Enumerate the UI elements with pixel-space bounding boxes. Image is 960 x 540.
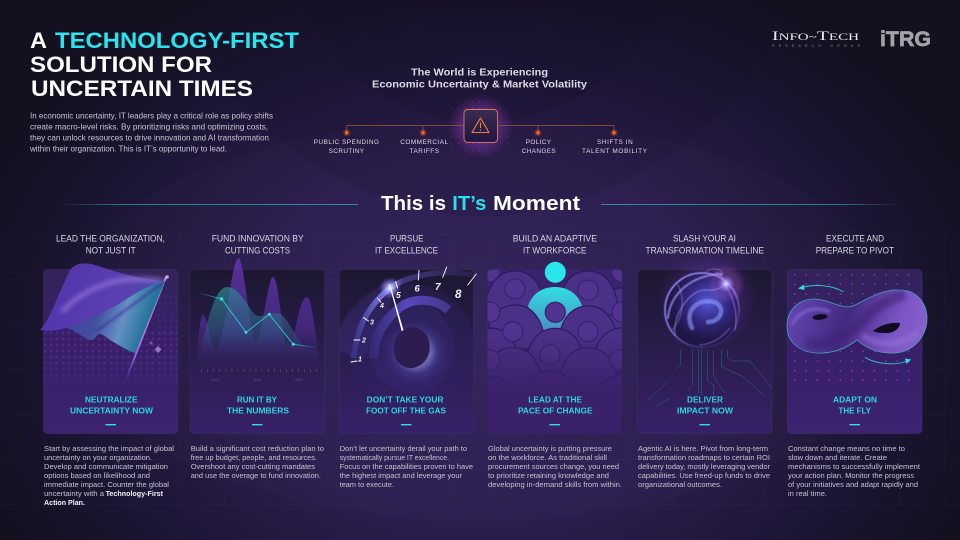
card caption <box>70 395 153 425</box>
intro text: within their organization. This is IT’s opportunity to lead. <box>29 144 227 154</box>
risk node: public spending scrutiny: SCRUTINY <box>329 148 365 155</box>
chart: area peaks and line: 2027 <box>295 378 303 382</box>
arrow: bottom curved <box>865 357 911 364</box>
intro text: In economic uncertainty, IT leaders play a critical role as policy shifts <box>30 112 273 120</box>
description: and use the overage to fund innovation. <box>191 471 321 480</box>
description: team to execute. <box>340 480 394 489</box>
dot grid <box>794 274 910 381</box>
description: Agentic AI is here. Pivot from long-term <box>638 444 768 453</box>
card caption: PACE OF CHANGE <box>518 406 593 415</box>
card background <box>44 270 178 434</box>
heading: CUTTING COSTS <box>225 246 290 256</box>
heading: PURSUE <box>390 234 424 244</box>
description <box>44 444 174 507</box>
card caption: THE FLY <box>838 406 872 415</box>
heading: SLASH YOUR AI <box>673 234 736 244</box>
risk node: policy changes <box>522 129 556 155</box>
title: A <box>30 28 47 53</box>
description: systematically pursue IT excellence. <box>340 453 449 462</box>
description: Start by assessing the impact of global <box>44 444 174 453</box>
heading: IT WORKFORCE <box>523 246 586 256</box>
risk node: commercial tariffs: TARIFFS <box>410 148 439 155</box>
description: capabilities. Use freed-up funds to drive <box>638 471 770 480</box>
card caption <box>833 395 877 425</box>
card caption <box>227 395 290 425</box>
heading: world uncertainty: The World is Experiencing <box>411 68 548 78</box>
icon: speedometer gauge: 2 <box>361 338 366 344</box>
icon: speedometer gauge: 6 <box>414 284 420 294</box>
logo: Info-Tech Research Group: RESEARCH GROUP <box>772 44 861 48</box>
card caption: UNCERTAINTY NOW <box>70 406 153 415</box>
panel: execute and pivot <box>787 234 927 498</box>
panel: fund innovation <box>190 234 324 480</box>
heading: LEAD THE ORGANIZATION, <box>56 234 165 244</box>
pixel pattern <box>44 296 178 381</box>
card caption <box>366 395 447 425</box>
risk node: shifts in talent mobility: SHIFTS IN <box>597 139 633 146</box>
panel: adaptive workforce <box>488 235 622 488</box>
description: uncertainty with a <box>44 489 105 498</box>
card background <box>638 270 772 434</box>
card background <box>340 270 474 434</box>
description <box>191 444 324 480</box>
risk node: shifts in talent mobility <box>582 129 648 155</box>
description: immediate impact. Counter the global <box>44 480 169 489</box>
description <box>788 444 921 498</box>
circuit traces <box>648 349 772 406</box>
section heading: Moment <box>493 192 580 215</box>
description: delivery today, mostly leveraging vendor <box>638 462 770 471</box>
heading <box>816 234 894 256</box>
panel: lead the organization <box>40 234 178 507</box>
description: in real time. <box>788 489 827 498</box>
card caption: NEUTRALIZE <box>85 395 138 404</box>
panel: AI transformation <box>638 234 772 489</box>
card caption <box>677 395 733 425</box>
icon: speedometer gauge <box>340 266 477 394</box>
description: Don’t let uncertainty derail your path to <box>340 444 467 453</box>
icon: speedometer gauge: 7 <box>435 282 441 293</box>
description: organizational outcomes. <box>638 480 722 489</box>
risk node: shifts in talent mobility: TALENT MOBILITY <box>582 148 648 155</box>
card caption: LEAD AT THE <box>528 395 583 404</box>
logo: Info-Tech Research Group <box>772 29 861 48</box>
heading: TRANSFORMATION TIMELINE <box>646 246 764 256</box>
card caption: ADAPT ON <box>833 395 877 404</box>
description: procurement sources change, you need <box>488 462 619 471</box>
chart: area peaks and line: 2025 <box>211 378 219 382</box>
description: slow down and iterate. Create <box>788 453 887 462</box>
description: uncertainty on your organization. <box>44 453 152 462</box>
heading: NOT JUST IT <box>86 246 136 256</box>
description: options based on likelihood and <box>44 471 150 480</box>
description <box>638 444 770 489</box>
description: Technology-First <box>106 489 163 498</box>
icon: energy orb <box>658 248 758 348</box>
icon: speedometer gauge: 4 <box>379 303 384 310</box>
chart: area peaks and line <box>196 258 322 382</box>
icon: speedometer gauge: 1 <box>358 356 362 364</box>
section heading <box>60 192 900 215</box>
description: Constant change means no time to <box>788 444 905 453</box>
description: free up budget, people, and resources. <box>191 453 317 462</box>
description: your action plan. Monitor the progress <box>788 471 914 480</box>
heading: IT EXCELLENCE <box>375 246 438 256</box>
risk node: public spending scrutiny: PUBLIC SPENDING <box>314 139 379 146</box>
risk node: policy changes: POLICY <box>526 139 552 146</box>
card caption: DON’T TAKE YOUR <box>367 395 444 404</box>
heading: PREPARE TO PIVOT <box>816 246 894 256</box>
description: Develop and communicate mitigation <box>44 462 168 471</box>
section heading: IT’s <box>452 192 486 215</box>
card background <box>788 270 922 434</box>
card background <box>488 270 622 434</box>
arrow: top curved <box>798 284 843 292</box>
heading: EXECUTE AND <box>826 234 884 244</box>
card caption <box>518 395 593 425</box>
logo: Info-Tech Research Group: I NFO~ T ECH <box>772 29 859 43</box>
description: Action Plan. <box>44 498 85 507</box>
icon: warning triangle <box>464 110 498 142</box>
icon: speedometer gauge: 3 <box>370 320 374 326</box>
chart: area peaks and line: 2026 <box>253 378 261 382</box>
heading <box>212 234 304 256</box>
card caption: RUN IT BY <box>237 395 278 404</box>
logo: ITRG: iTRG <box>880 27 931 51</box>
risk connector diagram <box>314 94 648 158</box>
heading: world uncertainty: Economic Uncertainty & Market Volatility <box>372 80 587 90</box>
description: Build a significant cost reduction plan to <box>191 444 324 453</box>
title: SOLUTION FOR <box>30 52 212 77</box>
description: to prioritize retaining knowledge and <box>488 471 609 480</box>
description: Global uncertainty is putting pressure <box>488 444 612 453</box>
icon: speedometer gauge: 8 <box>455 289 462 301</box>
title: TECHNOLOGY-FIRST <box>55 28 299 53</box>
heading: BUILD AN ADAPTIVE <box>513 234 597 244</box>
icon: infinity loop <box>787 290 927 353</box>
description: mechanisms to successfully implement <box>788 462 921 471</box>
risk node: commercial tariffs <box>400 129 448 155</box>
title: UNCERTAIN TIMES <box>31 76 253 101</box>
card caption: THE NUMBERS <box>227 406 290 415</box>
risk node: commercial tariffs: COMMERCIAL <box>400 139 448 146</box>
description: the highest impact and leverage your <box>340 471 462 480</box>
heading <box>513 234 597 256</box>
heading <box>56 234 165 256</box>
description: developing in-demand skills from within. <box>488 480 622 489</box>
heading <box>375 234 438 256</box>
description: Focus on the capabilities proven to have <box>340 462 473 471</box>
heading <box>646 234 764 256</box>
card background <box>190 270 324 434</box>
description: transformation roadmaps to certain ROI <box>638 453 770 462</box>
card caption: IMPACT NOW <box>677 406 733 415</box>
card caption: DELIVER <box>687 395 723 404</box>
title <box>30 28 299 101</box>
heading: world uncertainty <box>372 68 587 90</box>
description <box>488 444 622 489</box>
description: on the workforce. As traditional skill <box>488 453 607 462</box>
risk node: policy changes: CHANGES <box>522 148 556 155</box>
icon: flag <box>40 263 169 382</box>
heading: FUND INNOVATION BY <box>212 234 304 244</box>
panel: pursue IT excellence <box>339 234 476 489</box>
card caption: FOOT OFF THE GAS <box>366 406 447 415</box>
description: Overshoot any cost-cutting mandates <box>191 462 315 471</box>
risk node: public spending scrutiny <box>314 129 379 155</box>
description <box>340 444 473 489</box>
section heading: This is <box>381 192 446 215</box>
icon: crowd with highlighted leader <box>488 262 622 372</box>
intro text: create macro-level risks. By prioritizing risks and optimizing costs, <box>30 122 268 132</box>
icon: speedometer gauge: 5 <box>396 290 401 300</box>
intro text: they can unlock resources to drive innovation and AI transformation <box>30 134 269 142</box>
intro text <box>29 112 273 154</box>
description: of your initiatives and adapt rapidly and <box>788 480 918 489</box>
